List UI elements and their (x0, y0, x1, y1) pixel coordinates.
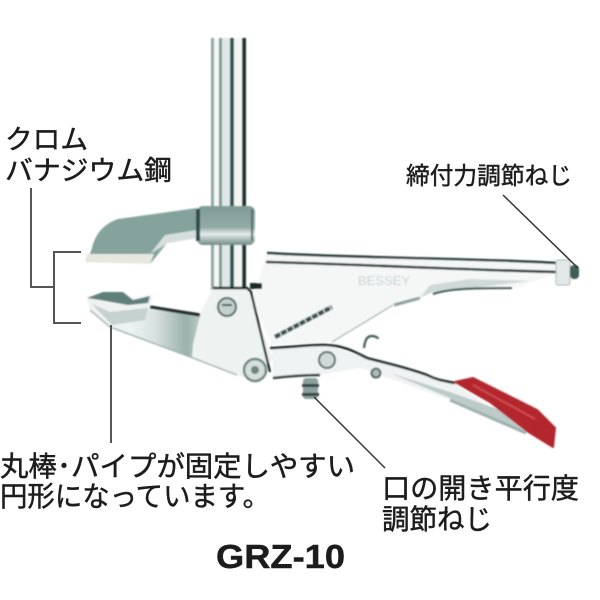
embossed brand mark: BESSEY (358, 273, 410, 288)
label: chrome vanadium steel: クロム (5, 125, 88, 155)
leader line: round jaw (110, 325, 112, 443)
clamp illustration (85, 38, 579, 447)
label: jaw parallel adjusting screw: 調節ねじ (382, 504, 492, 535)
lower jaw and pivot plate (87, 288, 273, 378)
upper jaw (85, 208, 197, 264)
pivot rivet lower (244, 359, 266, 381)
leader line: parallel screw (314, 397, 385, 468)
upper handle body (250, 253, 557, 348)
end cap with tension screw (556, 260, 579, 285)
pivot rivet upper (218, 298, 236, 316)
label: round jaw note: 円形になっています。 (0, 481, 270, 512)
vertical rod (211, 38, 246, 290)
red handle grip (455, 378, 555, 447)
handle rivets (319, 352, 380, 378)
sliding collar (196, 206, 255, 245)
bracket: material callout (31, 188, 81, 323)
leader line: tension screw (503, 195, 578, 268)
label: jaw parallel adjusting screw: 口の開き平行度 (382, 473, 579, 504)
model name: GRZ-10 (216, 538, 345, 575)
label: round jaw note: 丸棒･パイプが固定しやすい (0, 451, 355, 482)
label: tension adjusting screw: 締付力調節ねじ (406, 163, 572, 190)
lower handle (270, 345, 528, 433)
label: chrome vanadium steel: バナジウム鋼 (5, 156, 172, 186)
jaw parallel adjusting screw (302, 378, 319, 399)
